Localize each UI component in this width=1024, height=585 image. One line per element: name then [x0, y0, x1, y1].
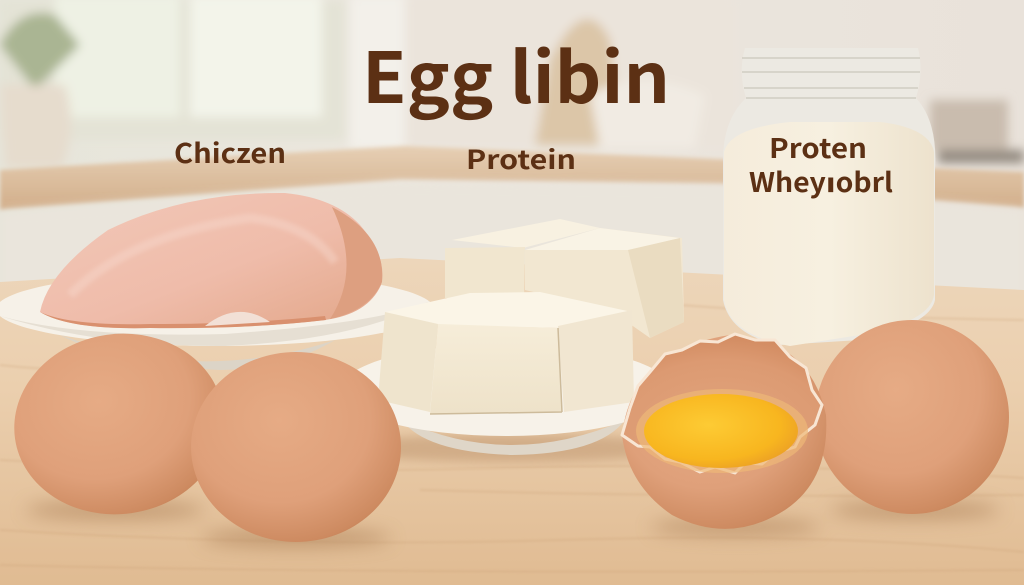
yolk	[644, 394, 798, 468]
milk jar	[723, 48, 935, 346]
title: Egg libin	[362, 23, 670, 124]
egg 1	[2, 320, 236, 528]
egg 4	[815, 320, 1009, 514]
label: jar protein: Proten	[769, 127, 867, 166]
tofu back	[445, 219, 684, 338]
wooden table	[0, 258, 1024, 585]
plate: tofu	[340, 344, 680, 462]
counter	[0, 146, 1024, 210]
tofu front	[378, 292, 634, 414]
plate: chicken	[0, 272, 434, 370]
egg shadows	[25, 501, 1000, 547]
label: jar whey: Wheyıobrl	[749, 161, 893, 200]
cracked egg	[622, 334, 826, 529]
chicken breast	[40, 193, 382, 328]
label: chicken: Chiczen	[174, 132, 286, 171]
label: protein: Protein	[466, 140, 576, 177]
egg 2	[191, 352, 401, 542]
